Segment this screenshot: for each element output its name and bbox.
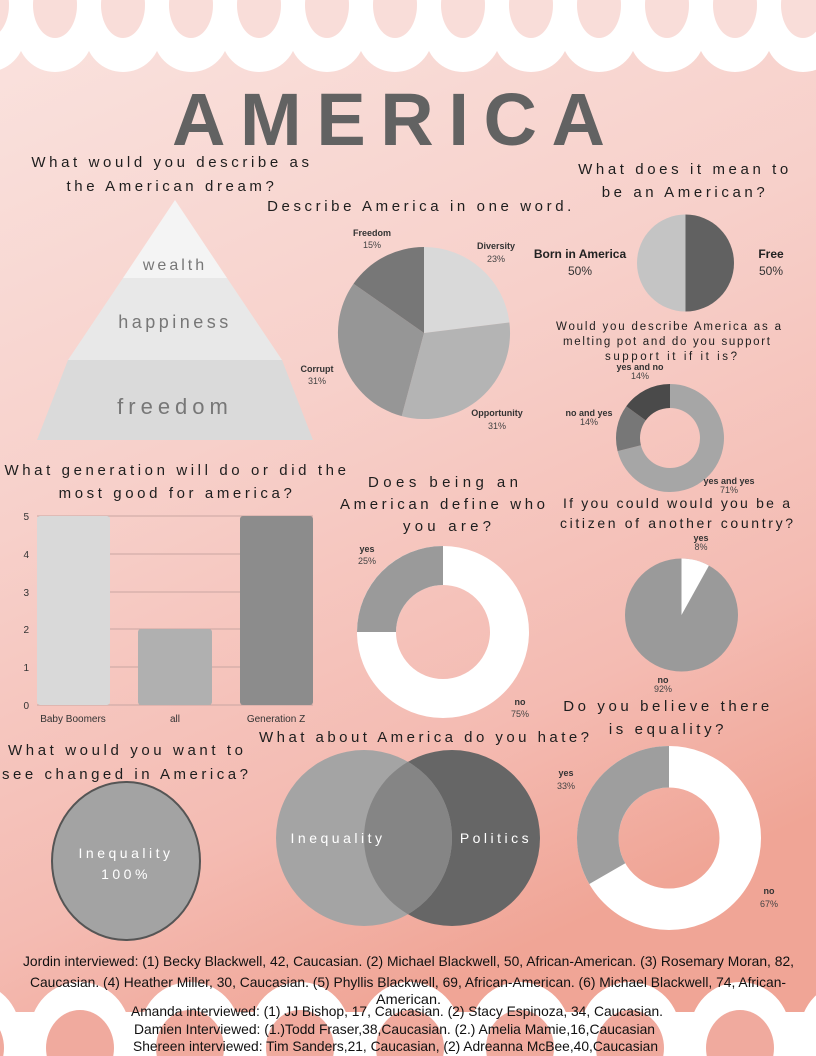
circle: inequality 100%: 100% — [101, 866, 151, 882]
heading: citizen: If you could would you be a — [563, 495, 790, 511]
heading: citizen — [560, 495, 793, 531]
pie chart: one word: Freedom — [353, 228, 391, 238]
heading: define who you are: American define who — [340, 496, 545, 513]
pyramid chart: happiness — [118, 312, 232, 332]
heading: equality: Do you believe there — [563, 698, 773, 715]
venn diagram: hate: Politics — [460, 830, 532, 846]
bar chart: generation: 0 — [23, 701, 29, 712]
pie chart: citizen: 92% — [654, 684, 672, 694]
heading: melting pot: Would you describe America as a — [556, 321, 782, 333]
circle: inequality 100%: Inequality — [79, 845, 173, 861]
pie chart: one word — [300, 228, 523, 431]
heading: define who you are — [340, 474, 545, 535]
pie chart: citizen: 8% — [694, 542, 708, 552]
heading: generation: most good for america? — [59, 485, 295, 502]
pyramid chart: wealth — [142, 257, 207, 274]
donut chart: equality: 33% — [557, 781, 575, 791]
pie chart: one word: Diversity — [477, 241, 515, 251]
bar chart: generation: 3 — [23, 588, 29, 599]
footer: interview credits: Jordin interviewed: (1) Becky Blackwell, 42, Caucasian. (2) Michael Blackwell, 50, African-American. (3) Rosemary Moran, 82, — [23, 953, 794, 969]
heading: citizen: citizen of another country? — [560, 515, 793, 531]
bar chart: generation: Baby Boomers — [40, 714, 106, 725]
bar chart: generation: 2 — [23, 625, 29, 636]
pie chart: born / free — [534, 214, 784, 312]
donut chart: melting pot: yes and yes — [703, 476, 755, 486]
donut chart: define: no — [514, 697, 526, 707]
pie chart: born / free: 50% — [568, 264, 592, 278]
pie chart: one word: Corrupt — [300, 364, 334, 374]
donut chart: melting pot — [565, 362, 755, 495]
heading: see changed — [2, 742, 248, 783]
pie chart: born / free: Born in America — [534, 247, 626, 261]
bar chart: generation: all — [170, 714, 180, 725]
donut chart: melting pot: 71% — [720, 485, 738, 495]
bar chart: generation — [23, 512, 313, 725]
donut chart: equality — [557, 746, 778, 909]
donut chart: melting pot: 14% — [631, 371, 649, 381]
bar chart: generation: 4 — [23, 550, 29, 561]
donut chart: melting pot: 14% — [580, 417, 598, 427]
donut chart: define — [357, 544, 529, 719]
donut chart: equality: 67% — [760, 899, 778, 909]
footer: interview credits: Caucasian. (4) Heather Miller, 30, Caucasian. (5) Phyllis Blackwell, 69, African-American. (6) Michael Blackwell, 74, African- — [30, 974, 786, 990]
bar chart: generation: 5 — [23, 512, 29, 523]
pie chart: one word: 23% — [487, 254, 505, 264]
heading: american dream: What would you describe as — [31, 154, 313, 171]
heading: equality: is equality? — [609, 721, 727, 738]
donut chart: define: 25% — [358, 556, 376, 566]
pie chart: citizen: yes — [693, 533, 709, 543]
top scallop border — [0, 0, 816, 72]
donut chart: melting pot: yes and no — [616, 362, 664, 372]
pie chart: one word: 31% — [488, 421, 506, 431]
heading: generation: What generation will do or did the — [4, 462, 350, 479]
pie chart: born / free: 50% — [759, 264, 783, 278]
footer: interview credits: Damien Interviewed: (1.)Todd Fraser,38,Caucasian. (2.) Amelia Mamie,16,Caucasian — [134, 1021, 655, 1037]
bar chart: generation: Generation Z — [247, 714, 305, 725]
heading: melting pot: support it if it is? — [605, 351, 737, 363]
heading: melting pot — [556, 321, 782, 363]
footer: interview credits: American. — [376, 991, 441, 1007]
bar chart: generation: 1 — [23, 663, 29, 674]
pyramid chart: freedom — [117, 394, 233, 419]
heading: see changed: see changed in America? — [2, 766, 248, 783]
pie chart: one word: 31% — [308, 376, 326, 386]
pie chart: citizen: no — [658, 675, 669, 685]
donut chart: melting pot: no and yes — [565, 408, 613, 418]
heading: see changed: What would you want to — [8, 742, 243, 759]
title: AMERICA — [172, 78, 605, 161]
heading: mean to be american: What does it mean to — [578, 161, 792, 178]
heading: american dream: the American dream? — [67, 178, 277, 195]
venn diagram: hate: Inequality — [291, 830, 385, 846]
heading: define who you are: Does being an — [368, 474, 518, 491]
pie chart: citizen — [625, 533, 738, 694]
footer: interview credits — [23, 953, 794, 1054]
heading: melting pot: melting pot and do you support — [563, 336, 771, 348]
bottom scallop border — [0, 982, 816, 1056]
footer: interview credits: Amanda interviewed: (1) JJ Bishop, 17, Caucasian. (2) Stacy Espinoza, 34, Caucasian. — [131, 1003, 663, 1019]
heading: mean to be american: be an American? — [602, 184, 768, 201]
circle: inequality 100% — [52, 782, 200, 940]
donut chart: equality: yes — [558, 768, 574, 778]
heading: one word: Describe America in one word. — [267, 198, 575, 215]
pie chart: one word: Opportunity — [471, 408, 523, 418]
pie chart: born / free: Free — [758, 247, 784, 261]
heading: hate: What about America do you hate? — [259, 729, 589, 746]
donut chart: define: yes — [359, 544, 375, 554]
donut chart: equality: no — [764, 886, 775, 896]
donut chart: define: 75% — [511, 709, 529, 719]
heading: define who you are: you are? — [403, 518, 491, 535]
pie chart: one word: 15% — [363, 240, 381, 250]
pyramid chart — [37, 200, 313, 440]
footer: interview credits: Shereen interviewed: Tim Sanders,21, Caucasian, (2) Adreanna McBee,40,Caucasian — [133, 1038, 658, 1054]
venn diagram: hate — [276, 750, 540, 926]
